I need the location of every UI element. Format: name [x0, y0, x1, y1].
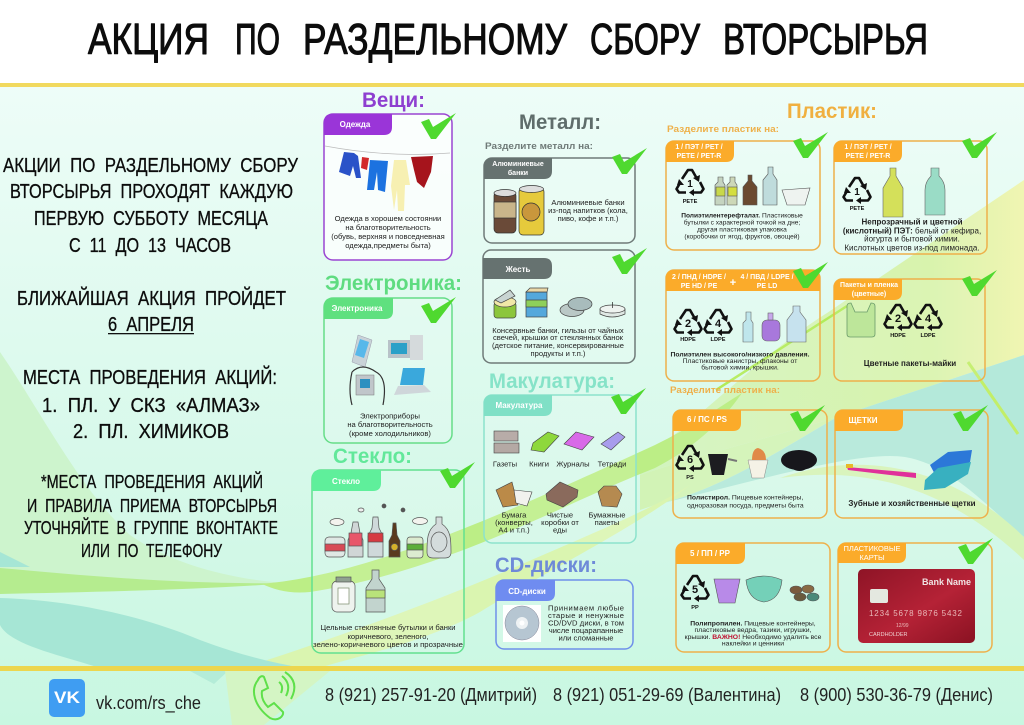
icon: recycling code 1	[676, 170, 704, 205]
icon: electronics devices	[350, 335, 431, 405]
heading: Макулатура: Макулатура:	[489, 370, 615, 393]
icon: bank card: Bank Name	[922, 577, 971, 587]
paper labels: Тетради	[598, 460, 626, 468]
check mark	[958, 538, 993, 564]
check mark	[793, 132, 828, 158]
panel: aluminium cans	[484, 148, 647, 243]
panel: tin: Жесть	[505, 265, 531, 274]
footer: VK link: VK	[54, 688, 81, 707]
icon: recycling codes 2 and 4: LDPE	[711, 337, 726, 343]
polystyrene description: одноразовая посуда, предметы быта	[687, 502, 804, 510]
icon: bank card: 1234 5678 9876 5432	[869, 609, 963, 618]
paper labels	[493, 460, 626, 534]
panel: CD disks: CD-диски	[508, 587, 546, 596]
panel: plastic cards: КАРТЫ	[859, 553, 885, 562]
icon: toothbrush and scrub brush	[846, 450, 972, 490]
tin description: продукты и т.п.)	[531, 349, 586, 358]
tin description: (детское питание, консервированные	[492, 341, 624, 350]
icon: cans	[494, 186, 544, 235]
icon: recycling codes 2 and 4: HDPE	[680, 337, 696, 343]
footer: phone numbers: 8 (900) 530-36-79 (Денис)	[800, 685, 993, 705]
panel: HDPE LDPE: 4 / ПВД / LDPE /	[740, 274, 794, 281]
schedule text	[3, 155, 298, 257]
heading: Стекло: Стекло:	[333, 445, 412, 468]
panel: PET clear: 1 / ПЭТ / PET /	[675, 144, 723, 151]
bottom yellow divider	[0, 666, 1024, 671]
header band	[0, 0, 1024, 84]
footer: VK link: vk.com/rs_che	[96, 693, 201, 714]
glass description: Цельные стеклянные бутылки и банки	[320, 623, 456, 632]
icon: phone	[254, 672, 294, 719]
heading: Пластик: Пластик:	[787, 100, 877, 123]
icon: recycling code 1	[844, 178, 870, 212]
panel: PET clear: PETE / PET-R	[677, 153, 721, 160]
HDPE description: бытовой химии, крышки.	[701, 364, 779, 372]
polypropylene description: Полипропилен. Пищевые контейнеры,	[690, 620, 816, 628]
title	[88, 15, 928, 64]
plastic subheading bottom: Разделите пластик на:	[670, 385, 780, 395]
paper labels: Книги	[529, 460, 549, 468]
CD description	[548, 604, 624, 642]
panel: plastic cards	[838, 538, 993, 652]
glass description	[313, 623, 463, 649]
paper labels: еды	[553, 526, 567, 534]
opaque PET description: Непрозрачный и цветной	[861, 218, 963, 226]
icon: recycling code 6: PS	[686, 475, 694, 481]
panel: HDPE LDPE: +	[730, 277, 736, 289]
footnote text	[24, 471, 278, 561]
top yellow divider	[0, 83, 1024, 87]
check mark	[962, 132, 997, 158]
schedule text: С 11 ДО 13 ЧАСОВ	[69, 235, 231, 257]
paper labels: Газеты	[493, 460, 517, 468]
footer: VK link	[49, 679, 201, 717]
icon: recycling codes 2 and 4: HDPE	[890, 333, 906, 339]
check mark	[790, 405, 825, 431]
panel: electronics	[324, 297, 456, 443]
CD description: CD/DVD диски, в том	[548, 618, 624, 628]
icon: recycling codes 2 and 4: LDPE	[921, 333, 936, 339]
opaque PET description	[843, 218, 981, 252]
footnote text: ИЛИ ПО ТЕЛЕФОНУ	[81, 540, 222, 561]
check mark	[421, 113, 456, 139]
check mark	[421, 297, 456, 323]
clothes description: Одежда в хорошем состоянии	[335, 214, 441, 223]
next event text: БЛИЖАЙШАЯ АКЦИЯ ПРОЙДЕТ	[17, 286, 286, 310]
paper labels: А4 и т.п.)	[498, 526, 530, 534]
footer: phone numbers: 8 (921) 051-29-69 (Валентина)	[553, 685, 781, 705]
schedule text: АКЦИИ ПО РАЗДЕЛЬНОМУ СБОРУ	[3, 155, 298, 177]
footer: phone numbers	[325, 685, 993, 705]
CD description: Принимаем любые	[548, 604, 624, 612]
panel: PET opaque: 1 / ПЭТ / PET /	[844, 144, 892, 151]
footnote text: И ПРАВИЛА ПРИЕМА ВТОРСЫРЬЯ	[27, 495, 277, 516]
footer: phone numbers: 8 (921) 257-91-20 (Дмитрий)	[325, 685, 537, 705]
opaque PET description: (кислотный) ПЭТ: белый от кефира,	[843, 226, 981, 236]
PET description: бутылки с характерной точкой на дне;	[684, 218, 800, 226]
icon: bank card	[858, 569, 975, 643]
polypropylene description: крышки. ВАЖНО! Необходимо удалить все	[685, 633, 822, 641]
next event text: 6 АПРЕЛЯ	[108, 314, 194, 336]
panel: HDPE LDPE: 2 / ПНД / HDPE /	[672, 274, 726, 281]
panel: clothes	[324, 113, 456, 260]
opaque PET description: Кислотных цветов из-под лимонада.	[844, 244, 980, 252]
icon: bank card: CARDHOLDER	[869, 632, 908, 638]
footnote text: УТОЧНЯЙТЕ В ГРУППЕ ВКОНТАКТЕ	[24, 517, 278, 538]
icon: bank card: 12/99	[896, 623, 909, 629]
electronics description: на благотворительность	[347, 420, 433, 429]
panel: brushes: ЩЕТКИ	[848, 416, 878, 425]
icon: recycling code 6	[676, 446, 704, 481]
icon: compact disc	[503, 605, 541, 642]
locations text: МЕСТА ПРОВЕДЕНИЯ АКЦИЙ:	[23, 365, 277, 389]
icon: recycling code 6: 6	[687, 454, 693, 466]
bags description: Цветные пакеты-майки	[864, 359, 956, 368]
HDPE description	[671, 352, 810, 372]
panel: colored bags	[834, 270, 997, 381]
plastic subheading top: Разделите пластик на:	[667, 124, 779, 134]
icon: plastic bag	[847, 303, 875, 337]
panel: paper: Макулатура	[496, 401, 543, 410]
paper labels: пакеты	[595, 518, 619, 527]
icon: recycling code 5: 5	[692, 584, 698, 596]
paper labels: Бумага	[502, 510, 527, 520]
aluminium description: пиво, кофе и т.п.)	[558, 214, 619, 223]
panel: brushes	[835, 405, 988, 518]
paper labels: Журналы	[556, 460, 590, 468]
panel: PET opaque	[834, 132, 997, 254]
polypropylene description: пластиковые ведра, тазики, игрушки,	[695, 627, 812, 634]
paper labels: (конверты,	[495, 518, 533, 527]
icon: recycling code 5	[682, 576, 708, 611]
check mark	[962, 270, 997, 296]
clothes description: (обувь, верхняя и повседневная	[331, 232, 445, 241]
CD description: или сломанные	[558, 634, 614, 642]
check mark	[793, 262, 828, 288]
paper labels: Бумажные	[589, 510, 625, 520]
left info text	[3, 155, 298, 561]
polypropylene description: наклейки и ценники	[722, 640, 784, 648]
tin description	[492, 326, 624, 358]
schedule text: ВТОРСЫРЬЯ ПРОХОДЯТ КАЖДУЮ	[10, 181, 293, 203]
panel: polystyrene: 6 / ПС / PS	[687, 415, 728, 424]
panel: colored bags: (цветные)	[852, 291, 886, 298]
icon: recycling codes 2 and 4: 2	[685, 318, 691, 330]
polystyrene description	[687, 494, 804, 510]
panel: clothes: Одежда	[340, 120, 371, 129]
panel: plastic cards: ПЛАСТИКОВЫЕ	[843, 544, 901, 553]
panel: paper	[484, 388, 646, 543]
panel: HDPE LDPE	[666, 262, 828, 381]
panel: glass: Стекло	[332, 477, 360, 486]
HDPE description: Пластиковые канистры, флаконы от	[683, 358, 797, 365]
clothes description: на благотворительность	[345, 223, 431, 232]
panel: aluminium cans: банки	[508, 169, 528, 177]
icon: recycling codes 2 and 4	[884, 305, 942, 339]
icon: recycling codes 2 and 4: 4	[715, 318, 722, 330]
icon: recycling codes 2 and 4	[674, 310, 732, 343]
heading: CD-диски: CD-диски:	[495, 554, 597, 577]
glass description: коричневого, зеленого,	[347, 632, 429, 641]
title: ПО	[235, 15, 280, 64]
panel: polystyrene	[673, 405, 827, 518]
PET description: другая пластиковая упаковка	[697, 226, 787, 234]
title: АКЦИЯ	[88, 15, 209, 64]
icon: opaque bottles	[883, 168, 945, 217]
icon: disposable tableware	[708, 448, 817, 478]
PET description: Полиэтилентерефталат. Пластиковые	[681, 212, 803, 220]
HDPE description: Полиэтилен высокого/низкого давления.	[671, 352, 810, 358]
check mark	[611, 388, 646, 414]
locations text: 1. ПЛ. У СКЗ «АЛМАЗ»	[42, 395, 260, 417]
clothes description: одежда,предметы быта)	[345, 241, 431, 250]
icon: paper types	[494, 431, 625, 507]
icon: recycling codes 2 and 4: 4	[925, 313, 932, 325]
aluminium description: из-под напитков (кола,	[548, 206, 628, 215]
panel: polypropylene	[676, 543, 830, 652]
aluminium description: Алюминиевые банки	[551, 198, 625, 207]
electronics description	[347, 412, 433, 438]
panel: glass	[312, 462, 475, 653]
tin description: Консервные банки, гильзы от чайных	[492, 326, 624, 335]
icon: glass bottles and jars	[325, 504, 451, 612]
polypropylene description	[685, 620, 822, 648]
icon: clothes on a line	[325, 146, 450, 211]
next event text	[17, 286, 286, 336]
title: СБОРУ	[590, 15, 701, 64]
heading: Вещи: Вещи:	[362, 89, 425, 112]
panel: polypropylene: 5 / ПП / PP	[690, 549, 731, 558]
glass description: зелено-коричневого цветов и прозрачные	[313, 640, 463, 649]
tin description: свечей, крышки от стеклянных банок	[493, 333, 624, 342]
title: РАЗДЕЛЬНОМУ	[303, 15, 568, 64]
panel: HDPE LDPE: PE LD	[757, 283, 777, 290]
icon: PET bottles and tray	[715, 167, 810, 205]
locations text: 2. ПЛ. ХИМИКОВ	[73, 421, 229, 443]
paper labels: коробки от	[541, 518, 579, 527]
footnote text: *МЕСТА ПРОВЕДЕНИЯ АКЦИЙ	[41, 471, 263, 492]
icon: bucket basin caps	[714, 576, 819, 603]
panel: electronics: Электроника	[332, 304, 383, 313]
paper labels: Чистые	[547, 510, 573, 520]
icon: recycling code 1: 1	[854, 187, 860, 198]
CD description: числе поцарапанные	[549, 626, 623, 635]
panel: HDPE LDPE: PE HD / PE	[681, 283, 718, 290]
schedule text: ПЕРВУЮ СУББОТУ МЕСЯЦА	[34, 208, 269, 230]
PET description	[681, 212, 803, 240]
panel: aluminium cans: Алюминиевые	[492, 161, 544, 168]
electronics description: (кроме холодильников)	[349, 429, 431, 438]
heading: Металл: Металл:	[519, 111, 601, 134]
brushes description: Зубные и хозяйственные щетки	[848, 499, 976, 508]
panel: tin	[483, 248, 647, 363]
title: ВТОРСЫРЬЯ	[723, 15, 928, 64]
heading: Электроника: Электроника:	[325, 272, 462, 295]
metal subheading: Разделите металл на:	[485, 141, 593, 151]
panel: PET opaque: PETE / PET-R	[846, 153, 890, 160]
icon: tin items	[494, 288, 625, 318]
clothes description	[331, 214, 445, 250]
icon: recycling codes 2 and 4: 2	[895, 313, 901, 325]
CD description: старые и ненужные	[548, 611, 624, 620]
panel: PET clear	[666, 132, 828, 250]
icon: recycling code 1: PETE	[683, 199, 698, 205]
icon: recycling code 1: PETE	[850, 206, 865, 212]
aluminium description	[548, 198, 628, 223]
check mark	[612, 248, 647, 274]
icon: detergent bottles	[743, 306, 806, 342]
panel: CD disks	[496, 580, 633, 649]
check mark	[953, 405, 988, 431]
icon: recycling code 5: PP	[691, 605, 699, 611]
electronics description: Электроприборы	[360, 412, 420, 420]
panel: colored bags: Пакеты и пленка	[840, 282, 898, 289]
icon: recycling code 1: 1	[687, 179, 693, 190]
PET description: (коробочки от ягод, фруктов, овощей)	[684, 232, 800, 240]
check mark	[440, 462, 475, 488]
opaque PET description: йогурта и бытовой химии.	[864, 234, 960, 244]
polystyrene description: Полистирол. Пищевые контейнеры,	[687, 494, 803, 502]
locations text	[23, 365, 277, 443]
check mark	[612, 148, 647, 174]
